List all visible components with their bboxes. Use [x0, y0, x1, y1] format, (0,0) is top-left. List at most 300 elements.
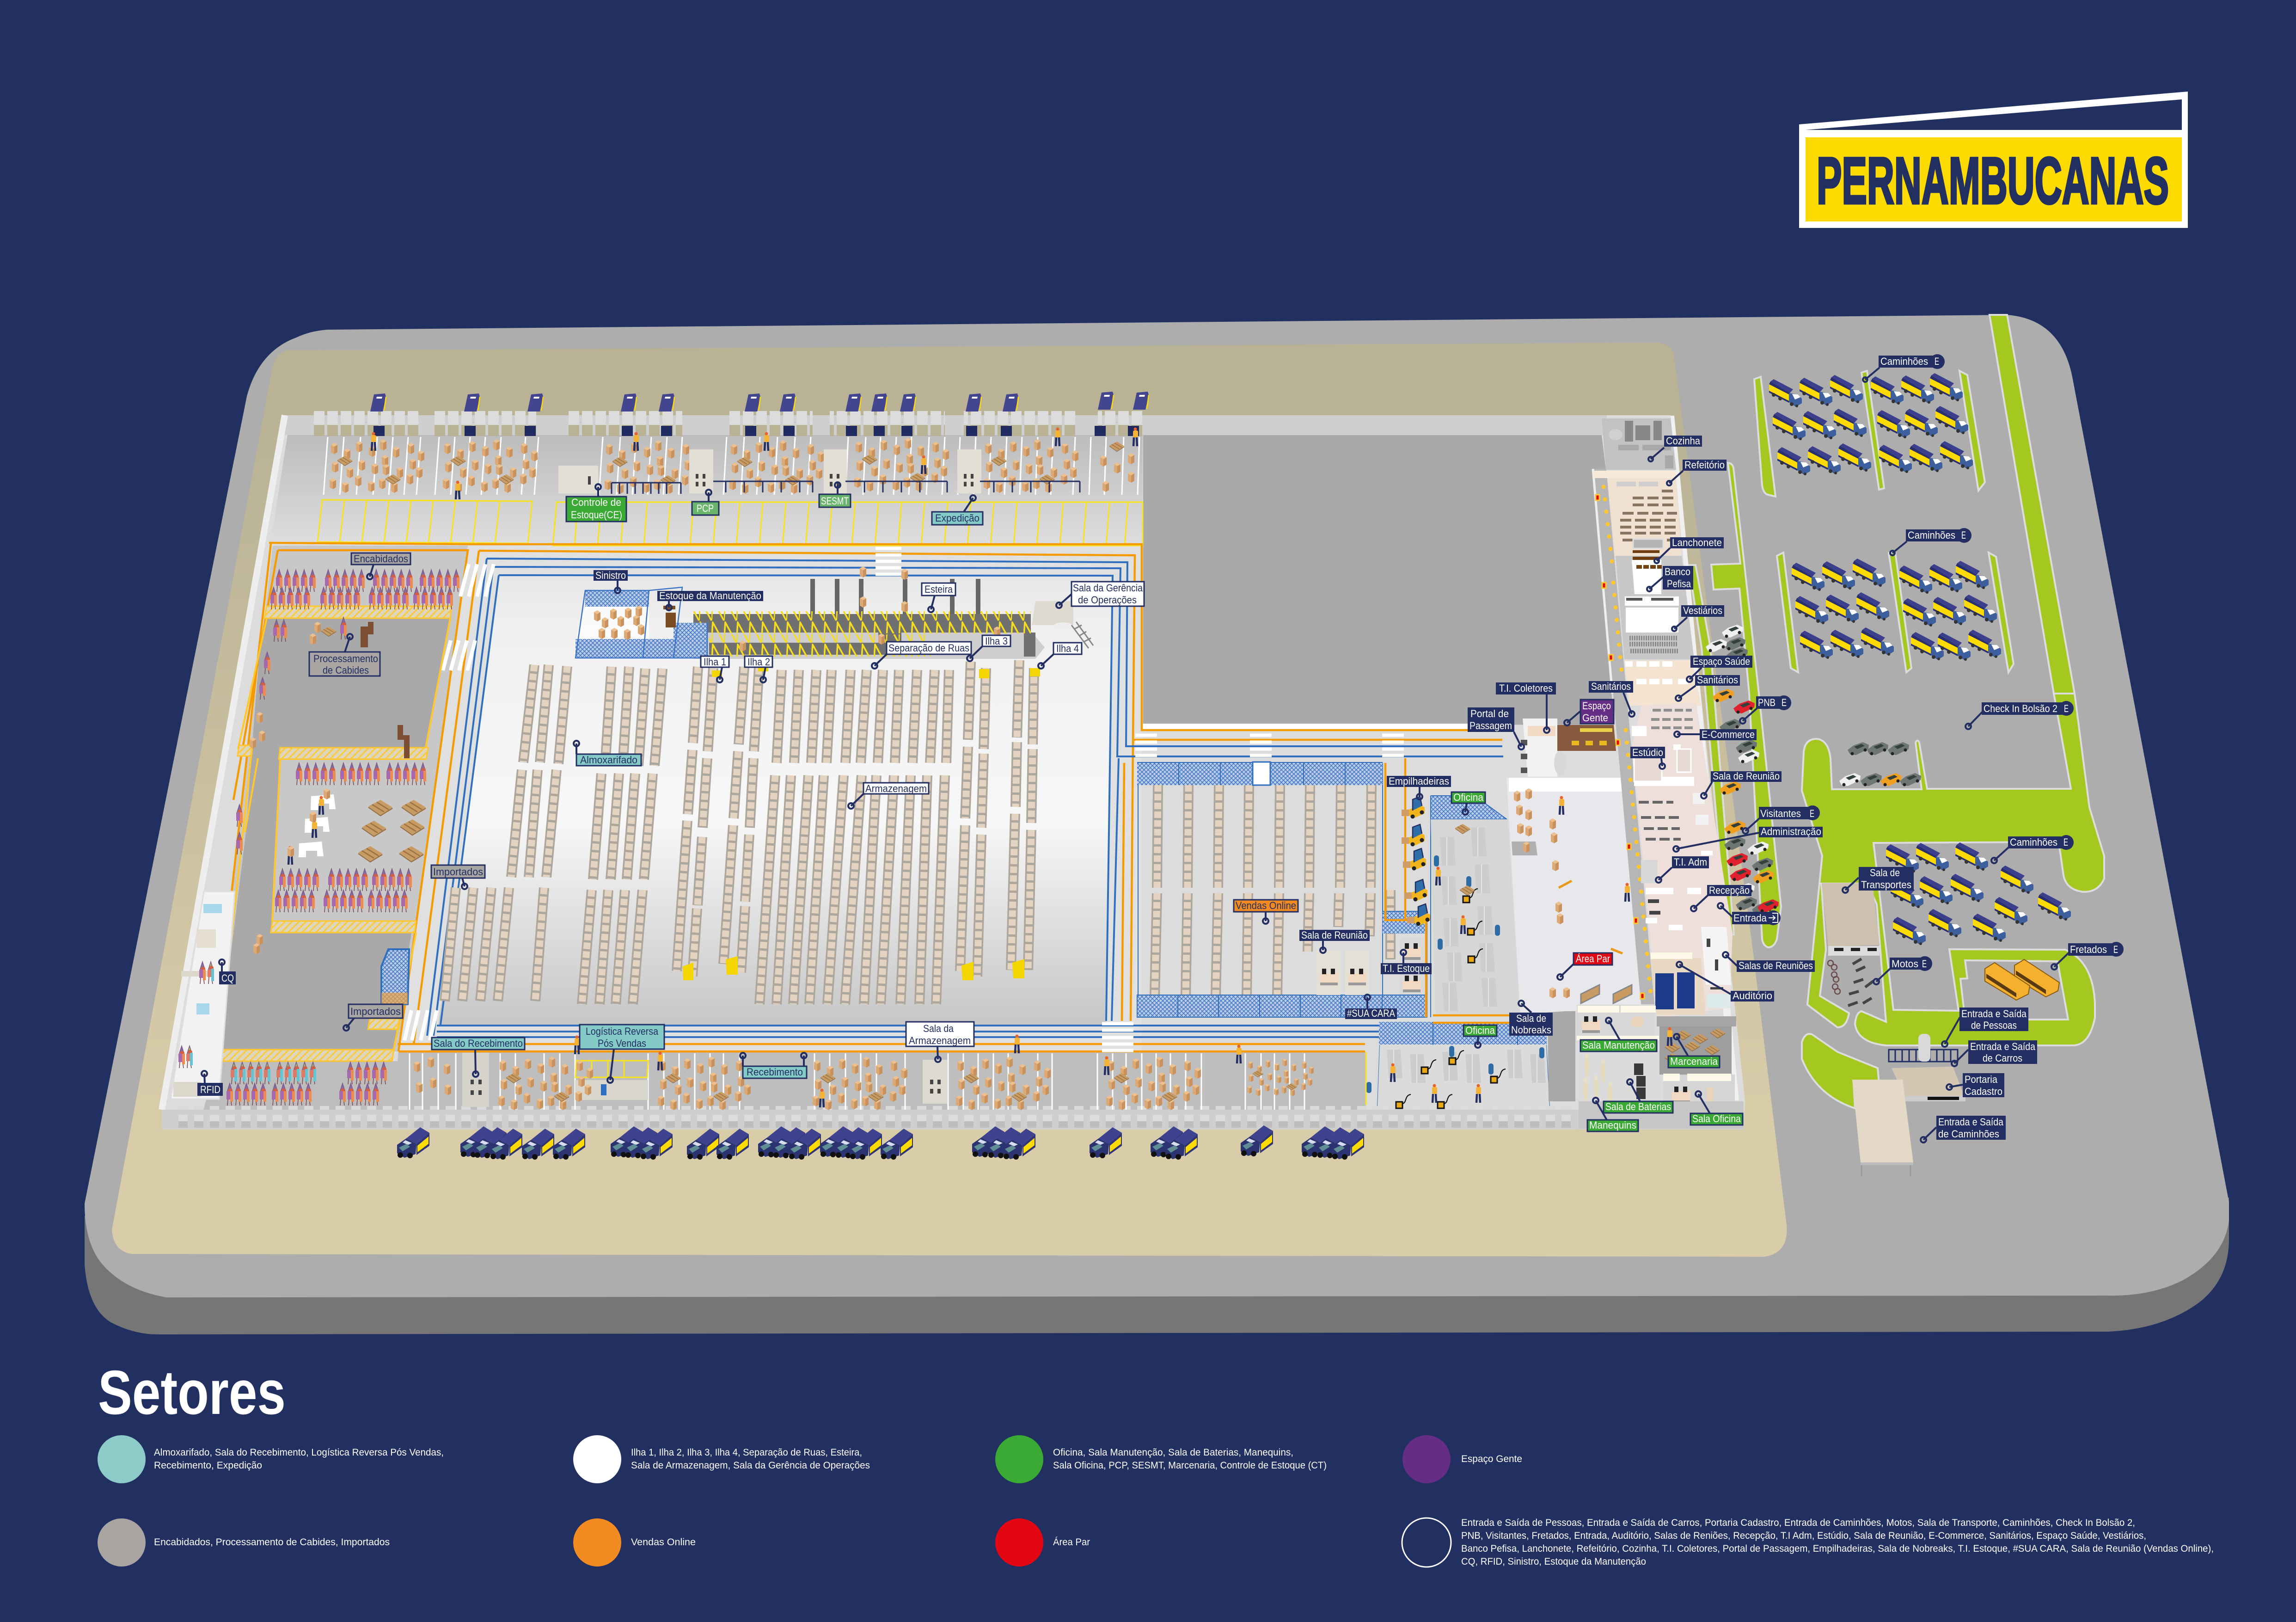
label: T.I. Coletores: T.I. Coletores — [1499, 682, 1553, 694]
oficina lower floor — [1378, 1045, 1549, 1106]
admin floor — [1632, 702, 1733, 1019]
bus lot pavement — [1960, 960, 2068, 1020]
label: Área Par: Área Par — [1576, 953, 1610, 965]
label: Lanchonete — [1654, 537, 1724, 563]
label: T.I. Coletores — [1496, 682, 1556, 733]
label: Controle de Estoque (CE): Estoque(CE) — [571, 509, 622, 521]
label: Caminhões E top: Caminhões — [1880, 356, 1928, 367]
label: Sala de Reunião left — [1299, 929, 1370, 953]
right white wall — [1671, 416, 1739, 1100]
label: Portaria Cadastro: Cadastro — [1965, 1086, 2002, 1097]
orange lines around T.I. — [1385, 758, 1549, 1023]
building side strip — [1689, 565, 1734, 934]
logo: Pernambucanas — [1799, 92, 2188, 228]
label: Vestiários — [1672, 605, 1724, 631]
legend: white: Ilha 1, Ilha 2, Ilha 3, Ilha 4, Separação de Ruas, Esteira, — [631, 1447, 862, 1458]
label: Ilha 3: Ilha 3 — [985, 635, 1008, 647]
label: Refeitório — [1667, 459, 1727, 485]
label: T.I. Adm: T.I. Adm — [1674, 856, 1707, 868]
label: Fretados E: Fretados — [2070, 944, 2107, 955]
legend: gray: Encabidados, Processamento de Cabides, Importados — [154, 1537, 390, 1548]
legend: red — [995, 1518, 1090, 1567]
label: #SUA CARA — [1345, 995, 1397, 1019]
lockers — [1440, 828, 1497, 1011]
label: E-Commerce — [1674, 729, 1757, 740]
label: Banco Pefisa: Banco — [1665, 566, 1690, 578]
label: T.I. Estoque: T.I. Estoque — [1383, 963, 1430, 974]
label: Armazenagem — [848, 783, 929, 809]
label: Sala do Recebimento — [432, 1038, 525, 1077]
panel: map labels — [197, 354, 2124, 1143]
pallet jacks — [1559, 881, 1623, 953]
dark processing floor — [219, 618, 450, 1049]
label: Ilha 1: Ilha 1 — [704, 656, 726, 668]
label: Banco Pefisa: Pefisa — [1667, 578, 1691, 590]
label: Sala de Baterias: Sala de Baterias — [1605, 1101, 1671, 1112]
auditorium — [1651, 958, 1706, 1015]
label: Visitantes E — [1743, 805, 1820, 834]
label: Ilha 3 — [967, 635, 1010, 661]
kitchen equipment — [1625, 421, 1662, 442]
bikes and motorcycles — [1828, 958, 1874, 1006]
label: T.I. Estoque — [1381, 950, 1432, 974]
label: Sala Manutenção: Sala Manutenção — [1582, 1039, 1655, 1051]
label: Refeitório: Refeitório — [1684, 459, 1725, 471]
top wall strip — [285, 415, 1607, 435]
label: Auditório: Auditório — [1733, 990, 1772, 1001]
long boundary green strip — [1990, 315, 2075, 694]
label: Ilha 4: Ilha 4 — [1056, 643, 1079, 654]
serving counter — [1633, 539, 1663, 548]
label: Sala Oficina: Sala Oficina — [1692, 1113, 1741, 1124]
label: Caminhões E top: E — [1935, 356, 1939, 367]
label: Motos E: E — [1922, 958, 1927, 970]
manutenção shelf — [663, 606, 676, 627]
heading: Setores: Setores — [98, 1358, 286, 1427]
panel: service rooms — [1577, 1005, 1744, 1129]
label: Sanitários left — [1589, 681, 1635, 717]
panel: building — [162, 411, 1745, 1130]
Portaria and entrance — [1852, 1034, 1965, 1176]
label: Marcenaria — [1668, 1034, 1720, 1068]
label: Sala da Armazenagem: Sala da — [923, 1023, 954, 1034]
label: Check In Bolsão 2 E: E — [2064, 703, 2069, 714]
label: Portal de Passagem: Passagem — [1469, 720, 1512, 731]
lanchonete and services — [1616, 556, 1694, 659]
legend: white: Sala de Armazenagem, Sala da Gerência de Operações — [631, 1460, 870, 1471]
label: Esteira: Esteira — [925, 584, 953, 595]
sand ground — [112, 343, 1787, 1257]
label: Auditório — [1677, 962, 1774, 1001]
label: Recepção: Recepção — [1709, 885, 1750, 896]
bottom wall with doors — [162, 1110, 1744, 1130]
fence posts — [1137, 762, 1518, 1045]
legend: outlined white — [1402, 1518, 2214, 1567]
truck lot islands — [1754, 371, 2014, 672]
admin parking strip — [1711, 463, 1781, 947]
battery stacks — [1634, 1063, 1646, 1099]
label: T.I. Adm — [1656, 856, 1709, 883]
top dock boxes — [330, 427, 1138, 499]
label: Processamento de Cabides: de Cabides — [323, 664, 369, 676]
panel: platform base — [85, 315, 2229, 1334]
label: Importados lower: Importados — [350, 1006, 401, 1017]
top dock doors — [314, 411, 1143, 436]
fire boxes and yellow dots — [1604, 487, 1652, 1002]
sala oficina — [1663, 1075, 1735, 1101]
legend: white — [573, 1435, 870, 1483]
label: Sala de Transportes: Sala de — [1870, 867, 1900, 879]
navy dock fences — [612, 481, 1080, 494]
cage outline — [576, 587, 707, 658]
label: CQ — [219, 959, 236, 984]
label: Espaço Saúde — [1687, 656, 1752, 682]
crosswalks — [404, 564, 494, 1040]
conveyor boxes — [740, 566, 1000, 651]
yellow side boundaries — [219, 618, 450, 1050]
label: #SUA CARA: #SUA CARA — [1347, 1008, 1395, 1019]
health rooms — [1624, 660, 1701, 706]
pallets and tables — [250, 622, 426, 954]
label: Recebimento — [740, 1053, 807, 1078]
label: Vendas Online: Vendas Online — [1236, 900, 1296, 911]
label: Entrada e Saída de Pessoas: de Pessoas — [1971, 1020, 2017, 1031]
label: Sala Oficina — [1690, 1091, 1743, 1125]
top dock bay lines — [324, 437, 1139, 495]
label: Entrada e Saída de Pessoas — [1942, 1008, 2028, 1047]
label: Espaço Gente: Espaço — [1582, 700, 1611, 712]
portaria building — [1892, 1067, 1964, 1096]
turret — [1918, 1034, 1930, 1062]
conveyor belts — [693, 614, 1035, 657]
label: Encabidados: Encabidados — [354, 553, 408, 565]
label: Banco Pefisa — [1647, 566, 1693, 591]
label: Sala da Gerência de Operações: Sala da Gerência — [1073, 582, 1143, 594]
label: PCP: PCP — [697, 503, 714, 514]
brown columns — [361, 622, 410, 758]
label: Estúdio — [1630, 747, 1665, 769]
importados blue cage — [381, 949, 409, 1004]
legend: teal: Recebimento, Expedição — [154, 1460, 262, 1471]
dark strip — [1657, 1016, 1736, 1026]
label: Empilhadeiras: Empilhadeiras — [1389, 775, 1449, 787]
E-commerce desks — [1651, 710, 1695, 728]
label: Controle de Estoque (CE) — [566, 484, 626, 522]
Esteira conveyor — [693, 566, 1093, 659]
legend: red: Área Par — [1053, 1537, 1090, 1548]
label: Fretados E: E — [2113, 944, 2118, 955]
road — [1593, 469, 1654, 1004]
ladder — [1071, 622, 1093, 648]
legend: outlined white: PNB, Visitantes, Fretados, Entrada, Auditório, Salas de Reniões, Recepção, T.I Adm, Estúdio, Sala de Reunião, E-Commerce, Sanitários, Espaço Saúde, Vestiários, — [1461, 1530, 2146, 1541]
door — [1253, 762, 1270, 785]
label: Ilha 1 — [701, 656, 729, 682]
label: Sala de Nobreaks — [1509, 1001, 1553, 1036]
legend: purple — [1402, 1435, 1522, 1483]
label: Controle de Estoque (CE): Controle de — [571, 497, 621, 508]
label: E-Commerce: E-Commerce — [1702, 729, 1755, 740]
label: Expedição: Expedição — [935, 512, 980, 524]
label: Entrada e Saída de Caminhões: de Caminhões — [1938, 1128, 1999, 1140]
Salas de Reuniões — [1701, 927, 1731, 985]
label: Vestiários: Vestiários — [1683, 605, 1722, 616]
label: Portaria Cadastro: Portaria — [1965, 1074, 1998, 1085]
drums and welders — [1434, 824, 1500, 963]
label: Processamento de Cabides: Processamento — [313, 653, 378, 664]
label: Sala do Recebimento: Sala do Recebimento — [434, 1038, 523, 1049]
label: PCP — [692, 490, 719, 515]
label: Cozinha — [1648, 435, 1702, 461]
label: Sala de Transportes: Transportes — [1861, 879, 1911, 891]
label: Oficina upper — [1451, 792, 1485, 815]
yellow parking grids — [318, 500, 1143, 546]
logistics yellow grid — [576, 1061, 648, 1077]
portal and T.I. Coletores — [1523, 719, 1557, 777]
label: Visitantes E: E — [1810, 808, 1814, 819]
truck canopy — [1852, 1080, 1913, 1162]
label: Marcenaria: Marcenaria — [1670, 1056, 1718, 1067]
label: Entrada e Saída de Caminhões — [1921, 1116, 2006, 1143]
label: Importados upper: Importados — [433, 866, 483, 878]
label: Sala da Gerência de Operações: de Operações — [1078, 594, 1137, 606]
label: Caminhões E lower: E — [2063, 836, 2068, 848]
T.I. Estoque desks — [1400, 939, 1425, 994]
label: Estoque da Manutenção: Estoque da Manutenção — [659, 590, 761, 602]
label: Lanchonete: Lanchonete — [1672, 537, 1722, 548]
label: Manequins — [1587, 1098, 1638, 1131]
label: Ilha 2 — [745, 656, 772, 682]
oficina upper floor — [1431, 819, 1520, 1014]
panel: left rooms CQ and RFID — [171, 891, 235, 1099]
label: Almoxarifado — [574, 741, 641, 766]
yellow hatched bands — [217, 606, 452, 1061]
panel: administrative wing — [1521, 702, 1733, 1019]
Sala de Transportes building — [1822, 883, 1880, 956]
bottom dock boxes — [414, 1035, 1314, 1110]
top dock rooms — [558, 449, 981, 493]
cafeteria tables — [1620, 491, 1678, 540]
label: Sala da Armazenagem: Armazenagem — [909, 1035, 971, 1046]
warehouse aisle band — [398, 546, 1142, 1051]
panel: hanger area Encabidados and Importados — [217, 570, 459, 1106]
Sala de Reunião rooms — [1316, 951, 1341, 995]
label: Espaço Saúde: Espaço Saúde — [1693, 656, 1750, 667]
platform side shadow — [85, 1198, 2229, 1334]
warehouse floor — [438, 574, 1113, 1025]
label: Ilha 2: Ilha 2 — [747, 656, 770, 668]
kitchen floor — [1602, 418, 1676, 470]
legend: orange: Vendas Online — [631, 1537, 696, 1548]
orange lanes — [214, 543, 1502, 1053]
label: Importados lower — [343, 1004, 403, 1031]
label: RFID — [197, 1071, 223, 1096]
legend: gray — [98, 1518, 390, 1567]
nobreak grey block — [1548, 1011, 1575, 1101]
panel: Vendas Online — [1137, 758, 1549, 1045]
legend: outlined white: Banco Pefisa, Lanchonete, Refeitório, Cozinha, T.I. Coletores, Portal de Passagem, Empilhadeiras, Sala de Nobreaks, T.I. Estoque, #SUA CARA, Sala de Reunião (Vendas Online), — [1461, 1543, 2214, 1554]
label: Separação de Ruas: Separação de Ruas — [888, 642, 969, 654]
label: Sanitários right — [1676, 674, 1740, 701]
conveyor chutes — [813, 579, 978, 617]
legend: green: Sala Oficina, PCP, SESMT, Marcenaria, Controle de Estoque (CT) — [1053, 1460, 1327, 1471]
bottom dock trucks — [397, 1125, 1364, 1160]
legend: outlined white: CQ, RFID, Sinistro, Estoque da Manutenção — [1461, 1556, 1646, 1567]
panel: floor lanes — [214, 543, 1549, 1106]
label: Entrada e Saída de Caminhões: Entrada e Saída — [1938, 1116, 2004, 1128]
label: RFID: RFID — [200, 1084, 220, 1095]
platform top — [85, 315, 2229, 1297]
label: Sala Manutenção — [1580, 1018, 1657, 1051]
legend: purple: Espaço Gente — [1461, 1454, 1522, 1464]
panel: Área Par — [1506, 778, 1641, 1014]
label: Área Par — [1557, 953, 1612, 980]
label: Sala da Armazenagem — [906, 1022, 974, 1062]
label: Motos E — [1874, 956, 1932, 984]
label: Motos E: Motos — [1892, 958, 1918, 970]
label: PNB E — [1740, 695, 1791, 724]
label: Portal de Passagem: Portal de — [1470, 708, 1509, 719]
Empilhadeiras forklifts — [1402, 797, 1430, 926]
label: Caminhões E top — [1863, 354, 1945, 382]
label: Sanitários right: Sanitários — [1697, 674, 1738, 686]
top dock floor — [270, 435, 1143, 547]
label: Armazenagem: Armazenagem — [865, 783, 927, 794]
cafeteria floor — [1593, 471, 1676, 478]
label: Sala de Baterias — [1604, 1079, 1673, 1113]
label: Check In Bolsão 2 E: Check In Bolsão 2 — [1984, 703, 2057, 714]
label: Sanitários left: Sanitários — [1591, 681, 1631, 692]
label: CQ: CQ — [221, 972, 234, 984]
Sinistro mesh cage — [576, 587, 707, 658]
courtyard roof — [1143, 435, 1614, 725]
label: Fretados E — [2051, 942, 2124, 970]
label: Salas de Reuniões — [1723, 952, 1815, 972]
blue lanes — [427, 559, 1516, 1037]
hanging clothes rows — [227, 570, 459, 1106]
label: Ilha 4 — [1038, 643, 1082, 669]
legend: outlined white: Entrada e Saída de Pessoas, Entrada e Saída de Carros, Portaria Cadastro, Entrada de Caminhões, Motos, Sala de Transporte, Caminhões, Check In Bolsão 2, — [1461, 1518, 2135, 1528]
label: Oficina lower — [1463, 1025, 1497, 1048]
legend: green — [995, 1435, 1327, 1483]
panel: parked cars — [1706, 625, 1921, 915]
lockers — [1629, 638, 1679, 651]
building floor — [162, 415, 1745, 1130]
label: Expedição — [932, 495, 983, 525]
label: Portaria Cadastro — [1947, 1073, 2004, 1097]
label: Visitantes E: Visitantes — [1760, 808, 1801, 819]
Espaço Gente room — [1557, 725, 1616, 751]
left white wall — [162, 415, 285, 1110]
admin desks — [1639, 802, 1681, 839]
label: Estoque da Manutenção — [657, 590, 763, 610]
label: Entrada e Saída de Carros: de Carros — [1983, 1052, 2022, 1064]
Sala de Reunião small rooms — [1693, 793, 1708, 825]
label: PNB E: PNB — [1758, 697, 1776, 708]
label: Administração: Administração — [1761, 826, 1821, 837]
desks in top dock rooms — [588, 474, 974, 486]
manequins room — [1577, 1036, 1663, 1101]
label: Caminhões E lower — [1991, 835, 2074, 863]
label: Portal de Passagem — [1468, 707, 1524, 750]
lower-left hanger floor — [203, 1061, 398, 1110]
label: Caminhões E middle — [1890, 528, 1971, 555]
white courtyard band — [1140, 724, 1469, 731]
right end wall — [1579, 1101, 1744, 1129]
label: Espaço Gente — [1564, 700, 1614, 725]
top dock trailers — [370, 392, 1149, 436]
label: Logística Reversa Pós Vendas: Logística Reversa — [586, 1026, 659, 1037]
bottom dock rooms — [462, 1053, 947, 1107]
label: Sinistro: Sinistro — [595, 570, 626, 581]
panel: kitchen and cafeteria — [1593, 416, 1739, 1100]
label: Sala de Nobreaks: Sala de — [1516, 1013, 1546, 1024]
manutenção room — [1577, 1005, 1655, 1036]
label: Administração — [1673, 826, 1823, 852]
label: SESMT — [819, 482, 851, 507]
label: Oficina upper: Oficina — [1453, 792, 1484, 803]
label: Sala de Reunião right — [1701, 770, 1782, 799]
label: Entrada e Saída de Pessoas: Entrada e Saída — [1961, 1008, 2027, 1020]
picking stairs — [683, 666, 1040, 980]
label: Entrada e Saída de Carros: Entrada e Saída — [1970, 1041, 2036, 1052]
label: Oficina lower: Oficina — [1465, 1025, 1495, 1036]
Sinistro boxes — [594, 606, 644, 640]
panel: Oficina — [1366, 819, 1575, 1108]
vendas fences — [1137, 762, 1547, 1044]
Gerência room — [1032, 601, 1073, 625]
label: Entrada with arrow: Entrada — [1733, 912, 1767, 924]
legend: green: Oficina, Sala Manutenção, Sala de Baterias, Manequins, — [1053, 1447, 1293, 1458]
hanger section floor — [214, 546, 468, 1051]
label: Cozinha: Cozinha — [1666, 435, 1701, 447]
metal shelves — [1581, 985, 1632, 1003]
grey storage block — [1512, 842, 1537, 855]
label: Check In Bolsão 2 E — [1965, 701, 2074, 729]
racks: Almoxarifado, Armazenagem, Vendas Online — [445, 660, 1510, 1004]
legend: teal: Almoxarifado, Sala do Recebimento, Logística Reversa Pós Vendas, — [154, 1447, 444, 1458]
label: Almoxarifado: Almoxarifado — [580, 754, 637, 766]
yellow corner — [1365, 1052, 1366, 1105]
legend: orange — [573, 1518, 696, 1567]
label: Recepção — [1691, 885, 1751, 911]
label: SESMT: SESMT — [821, 495, 849, 507]
label: Vendas Online — [1234, 900, 1298, 924]
label: Separação de Ruas — [872, 642, 971, 669]
label: Processamento de Cabides — [309, 634, 380, 676]
panel: right yard greens — [1689, 315, 2104, 1108]
label: Entrada with arrow — [1718, 903, 1781, 925]
label: Estúdio: Estúdio — [1632, 747, 1663, 758]
label: Logística Reversa Pós Vendas: Pós Vendas — [598, 1038, 646, 1049]
label: Sala de Reunião left: Sala de Reunião — [1301, 929, 1368, 941]
label: Manequins: Manequins — [1589, 1119, 1636, 1131]
Fretados buses — [1985, 959, 2059, 1000]
label: Sala de Transportes — [1843, 867, 1914, 893]
bottom dock floor — [393, 1052, 1366, 1110]
marcenaria — [1659, 1026, 1732, 1075]
label: Esteira — [922, 583, 955, 612]
panel: parked trucks — [1769, 373, 2071, 945]
Área Par racks — [1575, 801, 1617, 926]
label: Importados upper — [431, 865, 485, 889]
label: Logística Reversa Pós Vendas — [580, 1025, 664, 1083]
label: Salas de Reuniões: Salas de Reuniões — [1739, 960, 1813, 971]
label: Caminhões E middle: Caminhões — [1908, 529, 1955, 541]
label: Caminhões E lower: Caminhões — [2010, 836, 2057, 848]
lower left green — [1802, 1034, 1879, 1108]
central green area — [1802, 694, 2104, 1045]
legend: teal — [98, 1435, 444, 1483]
